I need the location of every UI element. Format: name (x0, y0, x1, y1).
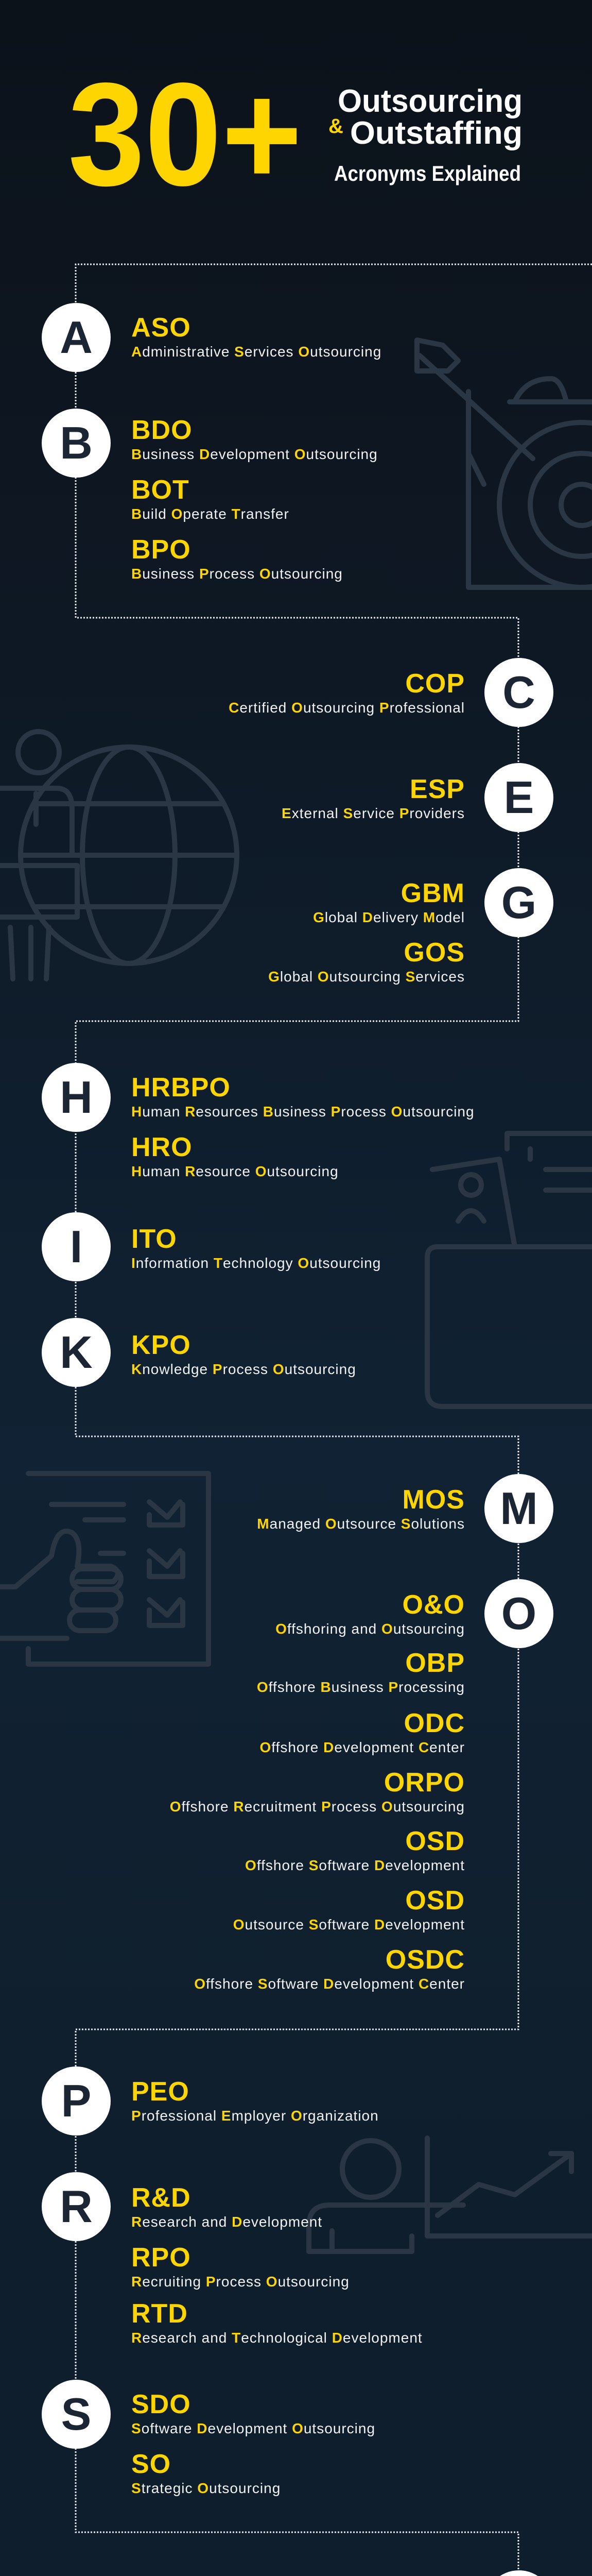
item: BPO (131, 535, 343, 582)
item: PEO: Professional Employer Organization (131, 2108, 379, 2124)
circle M (484, 1474, 553, 1543)
item: HRO: Human Resource Outsourcing (131, 1163, 339, 1179)
item: BPO: BPO (131, 535, 191, 565)
circle K: K (60, 1327, 93, 1378)
circle S: S (61, 2388, 91, 2439)
circle C: C (502, 667, 535, 718)
item: MOS: MOS (403, 1485, 465, 1515)
item: BOT: BOT (131, 475, 189, 505)
item: R&D: Research and Development (131, 2214, 322, 2230)
item: GBM: Global Delivery Model (313, 909, 465, 925)
circle T (484, 2570, 553, 2576)
item: OSDC: OSDC (386, 1945, 465, 1975)
item: OBP: Offshore Business Processing (257, 1679, 465, 1695)
item: RPO: Recruiting Process Outsourcing (131, 2274, 350, 2290)
circle K (42, 1318, 111, 1387)
circle R (42, 2172, 111, 2241)
item: BDO: Business Development Outsourcing (131, 446, 378, 462)
item: ASO (131, 313, 381, 360)
item: GOS (268, 938, 465, 985)
item: ODC: Offshore Development Center (259, 1739, 465, 1755)
circle E: E (504, 772, 534, 823)
icon: folder with id card (427, 1133, 592, 1406)
circle G (484, 868, 553, 937)
item: HRO: HRO (131, 1132, 193, 1162)
item: ITO: Information Technology Outsourcing (131, 1255, 381, 1271)
circle O (484, 1579, 553, 1648)
item: O&O: Offshoring and Outsourcing (275, 1621, 465, 1637)
item: OSD offshore (245, 1826, 465, 1873)
icon: person and globe (0, 732, 237, 979)
item: KPO: KPO (131, 1330, 191, 1360)
item: GOS: Global Outsourcing Services (268, 969, 465, 985)
icon: target (417, 340, 592, 587)
circle H (42, 1063, 111, 1132)
item: SO: Strategic Outsourcing (131, 2480, 281, 2496)
item: SDO (131, 2389, 375, 2436)
item: ODC (259, 1708, 465, 1755)
item: ORPO: ORPO (384, 1768, 465, 1798)
circle A (42, 303, 111, 372)
item: SO: SO (131, 2449, 171, 2479)
item: O&O (275, 1590, 465, 1637)
item: RTD: Research and Technological Development (131, 2330, 423, 2346)
item: O&O: O&O (403, 1590, 465, 1620)
item: HRBPO (131, 1073, 475, 1120)
item: BDO: BDO (131, 415, 193, 445)
item: RTD (131, 2299, 423, 2346)
item: ESP (282, 774, 465, 821)
item: BOT: Build Operate Transfer (131, 506, 289, 522)
circle R: R (60, 2181, 93, 2232)
circle I: I (70, 1221, 82, 1272)
circle B: B (60, 417, 93, 468)
item: SDO: Software Development Outsourcing (131, 2420, 375, 2436)
item: HRBPO: Human Resources Business Process Outsourcing (131, 1104, 475, 1120)
item: OSD outsource: OSD (405, 1886, 465, 1916)
title: Outsourcing (338, 83, 523, 119)
circle E (484, 763, 553, 832)
item: OSD offshore: Offshore Software Development (245, 1857, 465, 1873)
item: HRBPO: HRBPO (131, 1073, 231, 1103)
item: OSD offshore: OSD (405, 1826, 465, 1856)
item: ASO: ASO (131, 313, 191, 343)
item: ITO (131, 1224, 381, 1271)
item: GBM (313, 878, 465, 925)
item: ODC: ODC (404, 1708, 465, 1738)
item: KPO (131, 1330, 356, 1377)
item: SDO: SDO (131, 2389, 191, 2419)
item: OSD outsource: Outsource Software Development (233, 1917, 465, 1933)
item: COP: Certified Outsourcing Professional (229, 700, 465, 716)
title: Acronyms Explained (334, 161, 521, 185)
item: ESP: ESP (410, 774, 465, 804)
item: BOT (131, 475, 289, 522)
circle S (42, 2380, 111, 2449)
title: Outstaffing (350, 115, 523, 151)
item: RTD: RTD (131, 2299, 188, 2329)
item: MOS: Managed Outsource Solutions (257, 1516, 465, 1532)
item: R&D (131, 2183, 322, 2230)
icon: person with chart (309, 2138, 592, 2251)
item: R&D: R&D (131, 2183, 191, 2213)
circle O: O (501, 1588, 536, 1639)
item: KPO: Knowledge Process Outsourcing (131, 1361, 356, 1377)
circle H: H (60, 1072, 93, 1123)
circle A: A (60, 312, 93, 363)
item: PEO: PEO (131, 2077, 189, 2107)
item: ESP: External Service Providers (282, 805, 465, 821)
title: & (328, 115, 343, 138)
item: HRO (131, 1132, 339, 1179)
icon: checklist thumbs up (0, 1473, 208, 1664)
item: GOS: GOS (404, 938, 465, 968)
circle P: P (61, 2075, 91, 2126)
item: RPO (131, 2243, 350, 2290)
item: OBP (257, 1648, 465, 1695)
circle C (484, 658, 553, 727)
item: RPO: RPO (131, 2243, 191, 2273)
title (68, 53, 523, 206)
item: ITO: ITO (131, 1224, 177, 1254)
item: OSDC (194, 1945, 465, 1992)
item: COP (229, 669, 465, 716)
item: COP: COP (405, 669, 465, 699)
item: SO (131, 2449, 281, 2496)
circle P (42, 2066, 111, 2136)
item: BPO: Business Process Outsourcing (131, 566, 343, 582)
item: ORPO: Offshore Recruitment Process Outsourcing (170, 1799, 465, 1815)
circle G: G (501, 877, 536, 928)
item: ORPO (170, 1768, 465, 1815)
item: GBM: GBM (401, 878, 465, 908)
item: MOS (257, 1485, 465, 1532)
item: ASO: Administrative Services Outsourcing (131, 344, 381, 360)
item: PEO (131, 2077, 379, 2124)
circle I (42, 1212, 111, 1281)
item: OSD outsource (233, 1886, 465, 1933)
circle B (42, 409, 111, 478)
item: OBP: OBP (405, 1648, 465, 1678)
item: BDO (131, 415, 378, 462)
item: OSDC: Offshore Software Development Center (194, 1976, 465, 1992)
circle M: M (500, 1483, 538, 1534)
